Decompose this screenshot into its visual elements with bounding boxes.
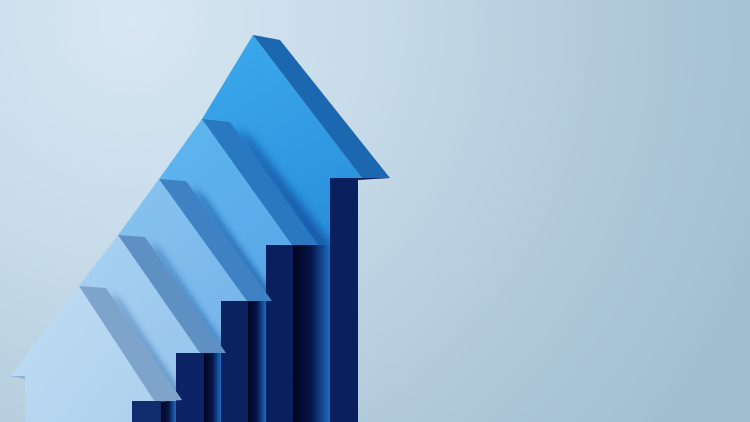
arrow 5: smallest, palest (10, 286, 182, 422)
arrow 2 side face (202, 119, 318, 245)
arrow 2 cast shadow (191, 186, 266, 292)
arrow 2 stem gap shadow (293, 245, 330, 422)
arrow 5 side face (79, 286, 182, 402)
arrow 1: largest, brightest (202, 35, 390, 422)
arrow 5 stem gap shadow (161, 401, 176, 422)
arrow 3 (118, 179, 272, 422)
arrow 4 side face (118, 235, 226, 353)
arrow 4 stem gap shadow (204, 353, 221, 422)
arrow 3 stem (221, 301, 248, 422)
arrow 3 side face (159, 179, 272, 301)
arrow 1 cast shadow (236, 128, 330, 245)
arrow 3 stem gap shadow (248, 301, 266, 422)
arrow 4 stem (176, 353, 204, 422)
arrow 2 stem (266, 245, 293, 422)
arrow 3 cast shadow (150, 242, 221, 346)
arrow 4 cast shadow (111, 293, 176, 401)
arrow 2 (159, 119, 330, 422)
arrow 5 front face (10, 286, 155, 422)
arrow 2 front face (159, 119, 292, 422)
arrow 4 front face (79, 235, 200, 422)
arrow 1 front face (202, 35, 362, 422)
arrow 3 front face (118, 179, 247, 422)
arrow 5 left tip edge (10, 376, 25, 379)
arrow 4 (79, 235, 226, 422)
arrow 5 stem (132, 401, 161, 422)
arrow 1 stem (330, 178, 390, 422)
arrow 1 side face (253, 35, 390, 178)
